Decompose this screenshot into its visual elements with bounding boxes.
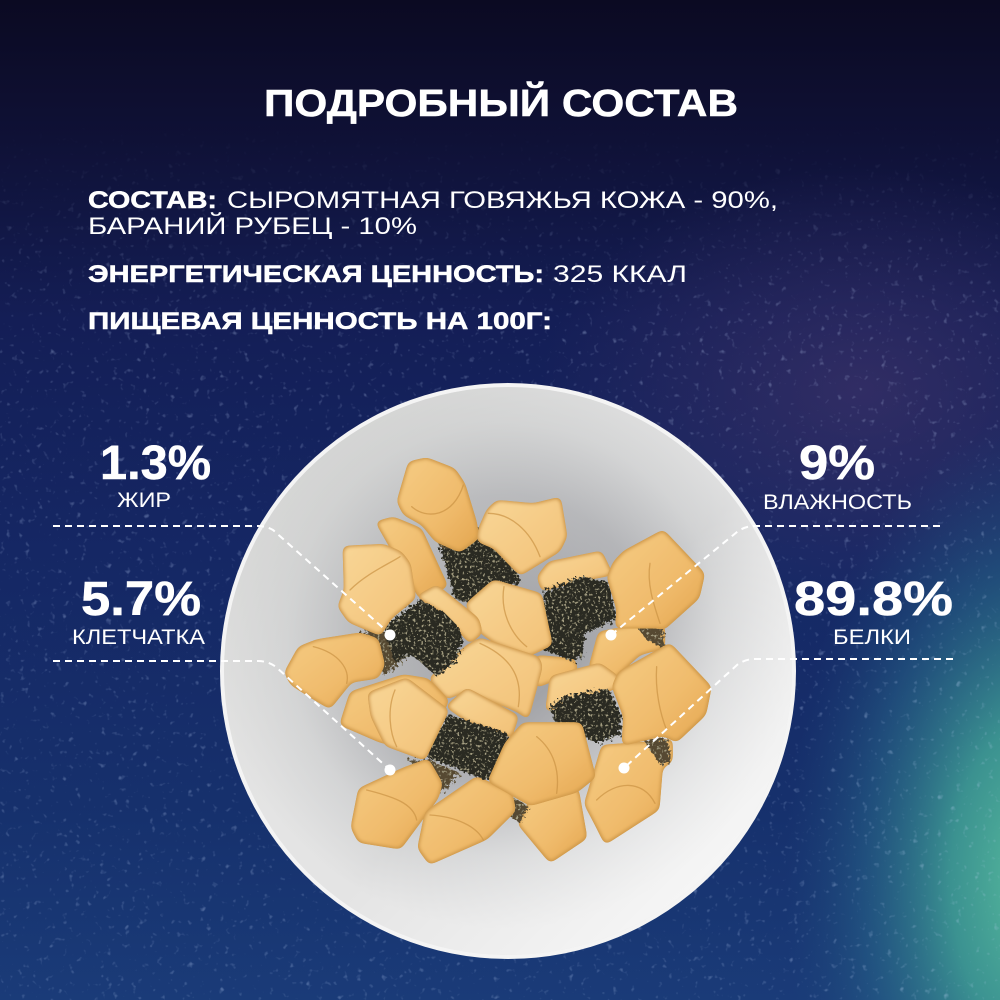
treat: top chew	[397, 457, 567, 605]
treat: back left roll	[375, 517, 448, 600]
fiber label: КЛЕТЧАТКА	[72, 626, 205, 649]
stat: protein	[618, 573, 953, 774]
treat: lower left chew	[339, 674, 596, 865]
moisture leader line	[611, 526, 940, 635]
composition label: СОСТАВ:	[88, 187, 217, 214]
fat value: 1.3%	[100, 437, 211, 490]
fat leader line	[53, 526, 390, 634]
fiber dot	[384, 764, 396, 776]
text block: composition	[88, 187, 778, 335]
stat: moisture	[606, 437, 940, 640]
composition line 2: БАРАНИЙ РУБЕЦ - 10%	[88, 212, 417, 240]
title: ПОДРОБНЫЙ СОСТАВ	[264, 80, 738, 125]
stat: fat	[53, 437, 396, 640]
nutrition heading: ПИЩЕВАЯ ЦЕННОСТЬ НА 100Г:	[88, 308, 552, 335]
treats on the plate	[284, 457, 712, 865]
moisture label: ВЛАЖНОСТЬ	[763, 491, 912, 514]
energy value: 325 ККАЛ	[553, 261, 687, 288]
plate	[220, 383, 796, 959]
fat label: ЖИР	[117, 489, 171, 512]
composition line 1: СЫРОМЯТНАЯ ГОВЯЖЬЯ КОЖА - 90%,	[227, 187, 778, 214]
energy label: ЭНЕРГЕТИЧЕСКАЯ ЦЕННОСТЬ:	[88, 261, 544, 288]
protein dot	[618, 762, 630, 774]
treat: lower right chew	[545, 643, 712, 845]
moisture dot	[606, 630, 616, 640]
fiber value: 5.7%	[81, 573, 201, 626]
protein value: 89.8%	[794, 573, 953, 626]
treat: left chew	[284, 544, 543, 720]
fiber leader line	[53, 661, 390, 770]
fat dot	[384, 630, 396, 640]
stat: fiber	[53, 573, 396, 776]
moisture value: 9%	[799, 437, 875, 490]
treat: center right chew	[465, 529, 705, 688]
protein label: БЕЛКИ	[833, 626, 911, 649]
protein leader line	[624, 659, 953, 768]
